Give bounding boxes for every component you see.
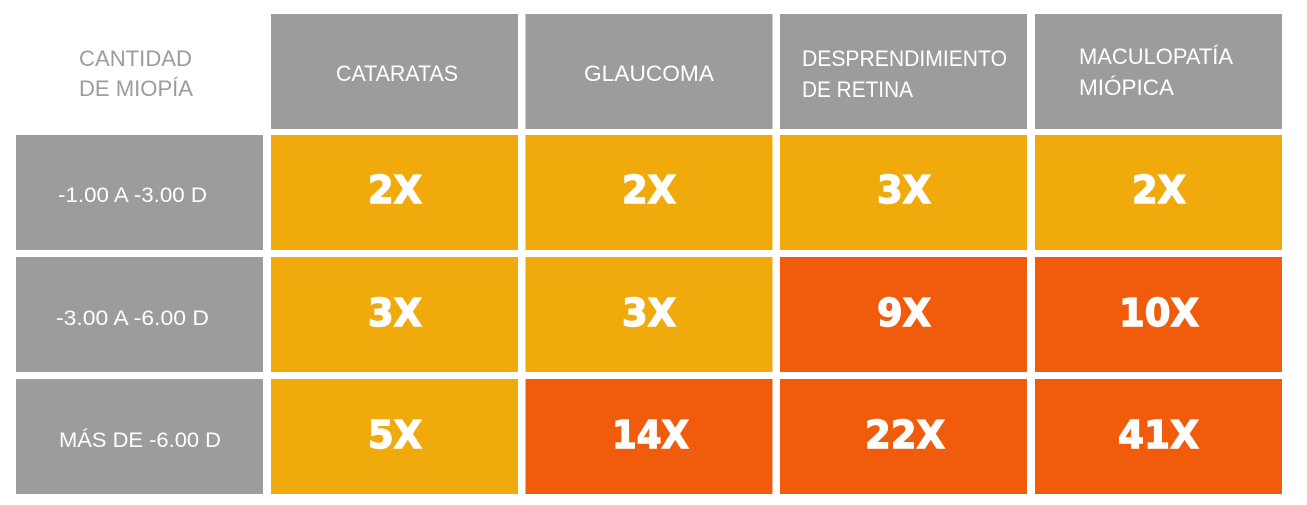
heading: cantidad de miopía: DE MIOPÍA	[79, 76, 193, 101]
heading: cantidad de miopía	[79, 46, 193, 101]
cell: maculopatía 2X: 2X	[1132, 168, 1186, 212]
row header: -3.00 a -6.00 D	[16, 257, 263, 372]
row header: más de -6.00 D	[16, 379, 263, 494]
cell: desprendimiento 9X: 9X	[877, 291, 931, 335]
cell: glaucoma 3X	[526, 257, 772, 372]
cell: cataratas 2X	[271, 135, 518, 250]
row header: más de -6.00 D: MÁS DE -6.00 D	[59, 429, 221, 452]
cell: cataratas 5X: 5X	[368, 413, 422, 457]
cell: cataratas 2X: 2X	[368, 168, 422, 212]
cell: cataratas 3X: 3X	[368, 291, 422, 335]
column header: desprendimiento de retina: DE RETINA	[802, 77, 913, 102]
column header: desprendimiento de retina: DESPRENDIMIENTO	[802, 46, 1007, 71]
column header: glaucoma	[526, 14, 772, 129]
cell: cataratas 3X	[271, 257, 518, 372]
cell: cataratas 5X	[271, 379, 518, 494]
cell: desprendimiento 3X: 3X	[877, 168, 931, 212]
column header: maculopatía miópica	[1035, 14, 1282, 129]
row header: -1.00 a -3.00 D	[16, 135, 263, 250]
column header: desprendimiento de retina	[780, 14, 1027, 129]
cell: glaucoma 14X: 14X	[612, 413, 689, 457]
cell: desprendimiento 22X: 22X	[865, 413, 945, 457]
cell: maculopatía 41X: 41X	[1118, 413, 1199, 457]
heading: cantidad de miopía: CANTIDAD	[79, 46, 192, 71]
row header: -3.00 a -6.00 D: -3.00 A -6.00 D	[56, 307, 209, 330]
cell: maculopatía 10X	[1035, 257, 1282, 372]
column header: maculopatía miópica: MIÓPICA	[1079, 75, 1174, 100]
column header: glaucoma: GLAUCOMA	[584, 61, 714, 86]
cell: glaucoma 3X: 3X	[622, 291, 676, 335]
cell: desprendimiento 9X	[780, 257, 1027, 372]
column header: maculopatía miópica: MACULOPATÍA	[1079, 44, 1233, 69]
cell: glaucoma 2X	[526, 135, 772, 250]
cell: glaucoma 14X	[526, 379, 772, 494]
cell: desprendimiento 3X	[780, 135, 1027, 250]
column header: cataratas	[271, 14, 518, 129]
cell: maculopatía 10X: 10X	[1119, 291, 1199, 335]
cell: maculopatía 2X	[1035, 135, 1282, 250]
column header: cataratas: CATARATAS	[336, 61, 458, 86]
row header: -1.00 a -3.00 D: -1.00 A -3.00 D	[58, 184, 207, 207]
cell: glaucoma 2X: 2X	[622, 168, 676, 212]
cell: maculopatía 41X	[1035, 379, 1282, 494]
cell: desprendimiento 22X	[780, 379, 1027, 494]
